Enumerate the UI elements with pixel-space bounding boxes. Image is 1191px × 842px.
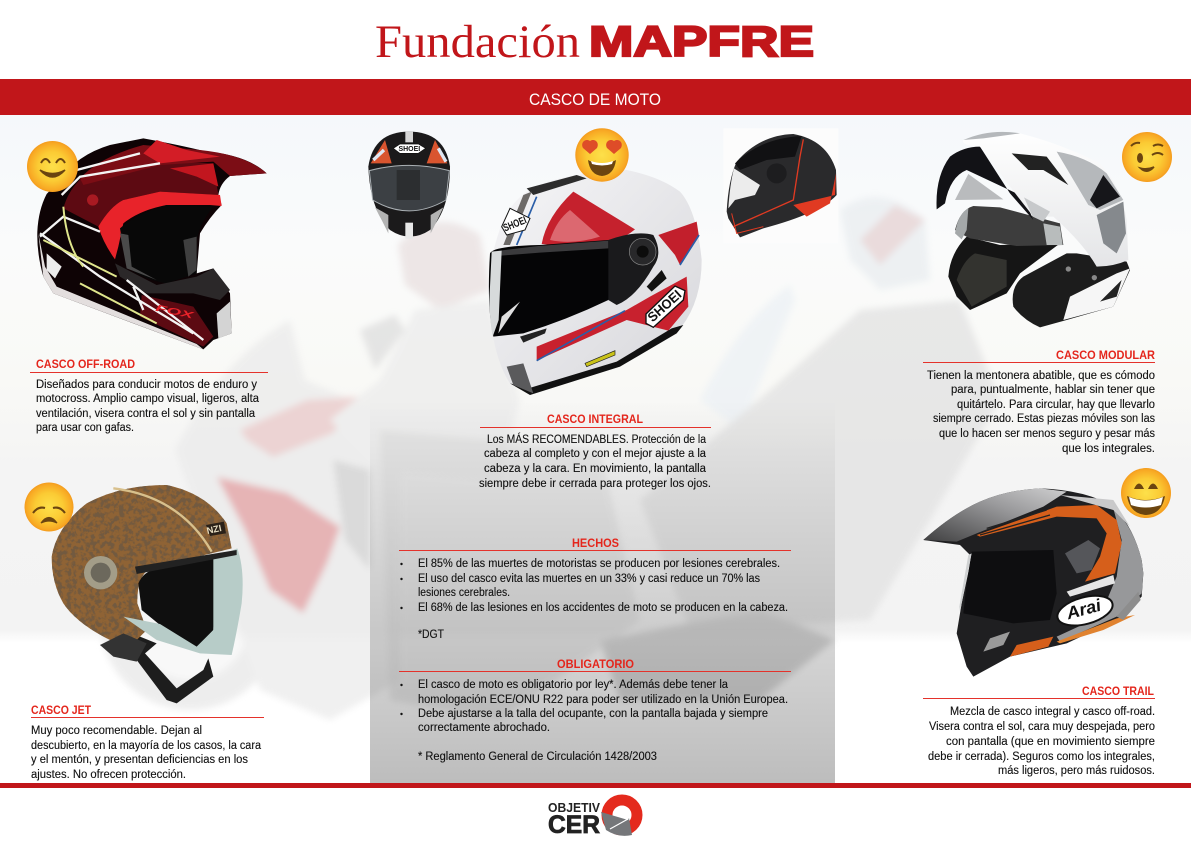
text block: casco modular: quitártelo. Para circular, hay que llevarlo (957, 399, 1155, 411)
helmet: off-road (37, 138, 267, 349)
text block: obligatorio (399, 659, 791, 763)
emoji: wink (1122, 132, 1172, 182)
title bar: CASCO DE MOTO (529, 90, 661, 109)
text block: casco jet: CASCO JET (31, 705, 91, 717)
text block: casco integral: Los MÁS RECOMENDABLES. Protección de la (487, 433, 707, 446)
logo: Fundación MAPFRE (375, 16, 814, 68)
emoji: smiling (27, 141, 78, 192)
emoji: big grin (1121, 468, 1171, 518)
text block: casco modular (923, 350, 1156, 455)
text block: hechos: lesiones cerebrales. (418, 587, 510, 599)
text block: casco off-road (30, 359, 268, 434)
logo: Fundación MAPFRE: Fundación (375, 16, 580, 68)
text block: casco jet: y el mentón, y presentan deficiencias en los (31, 754, 248, 766)
text block: casco modular: que los integrales. (1062, 443, 1155, 455)
helmet: off-road: FOX (155, 303, 196, 321)
helmet: trail (923, 488, 1143, 677)
text block: casco trail: con pantalla (que en movimiento siempre (946, 736, 1155, 748)
text block: obligatorio: * Reglamento General de Circulación 1428/2003 (418, 751, 657, 763)
helmet: Shoei integral: SHOEI (502, 214, 528, 234)
text block: casco modular: CASCO MODULAR (1056, 350, 1156, 362)
bottom red strip (0, 783, 1191, 788)
text block: hechos: El 85% de las muertes de motoristas se producen por lesiones cerebrales. (418, 558, 780, 570)
background photo: motorcycles (0, 115, 1191, 783)
text block: hechos (399, 538, 791, 641)
text block: casco integral: cabeza al completo y con el mejor ajuste a la (484, 448, 707, 460)
text block: casco modular: Tienen la mentonera abatible, que es cómodo (927, 370, 1155, 382)
text block: hechos: El uso del casco evita las muertes en un 33% y casi reduce un 70% las (418, 573, 760, 585)
helmet: small Shoei front view (368, 132, 450, 239)
text block: casco integral (479, 414, 711, 490)
logo: Objetivo Cero (548, 800, 637, 839)
helmet: trail: Arai (1063, 595, 1104, 623)
helmet: small Shoei front view: SHOEI (398, 146, 420, 153)
text block: casco trail: debe ir cerrada). Seguros como los integrales, (928, 751, 1155, 763)
helmet: modular (936, 132, 1130, 327)
text block: hechos: HECHOS (572, 538, 619, 550)
text block: casco trail: más ligeros, pero más ruidosos. (998, 765, 1155, 777)
emoji: heart eyes (575, 128, 629, 182)
helmet: jet (52, 485, 243, 703)
text block: hechos: *DGT (418, 629, 444, 641)
text block: casco trail: Mezcla de casco integral y casco off-road. (950, 706, 1155, 718)
text block: casco trail: CASCO TRAIL (1082, 686, 1154, 698)
helmet: Shoei integral: SHOEI (645, 287, 684, 325)
text block: obligatorio: OBLIGATORIO (557, 659, 634, 671)
text block: casco modular: que lo hacen ser menos seguro y pesar más (939, 428, 1155, 440)
text block: casco off-road: para usar con gafas. (36, 422, 134, 434)
title bar (0, 79, 1191, 115)
text block: obligatorio: homologación ECE/ONU R22 para poder ser utilizado en la Unión Europea. (418, 694, 788, 706)
text block: casco jet: Muy poco recomendable. Dejan al (31, 725, 202, 737)
text block: casco integral: siempre debe ir cerrada para proteger los ojos. (479, 478, 711, 490)
emoji: sad (24, 482, 74, 532)
text block: obligatorio: El casco de moto es obligatorio por ley*. Además debe tener la (418, 679, 729, 691)
logo: Objetivo Cero: CER (548, 811, 600, 839)
text block: obligatorio: Debe ajustarse a la talla del ocupante, con la pantalla bajada y siempre (418, 708, 768, 720)
text block: casco off-road: CASCO OFF-ROAD (36, 359, 135, 371)
text block: obligatorio: correctamente abrochado. (418, 722, 550, 734)
text block: casco off-road: Diseñados para conducir motos de enduro y (36, 379, 257, 391)
text block: casco off-road: ventilación, visera contra el sol y sin pantalla (36, 408, 256, 420)
text block: casco modular: siempre cerrado. Estas piezas móviles son las (933, 413, 1155, 425)
logo: Fundación MAPFRE: MAPFRE (589, 18, 814, 66)
helmet: jet: NZI (206, 523, 222, 536)
text block: casco jet: ajustes. No ofrecen protección. (31, 769, 186, 781)
text block: casco jet (31, 705, 264, 781)
text block: casco integral: CASCO INTEGRAL (547, 414, 643, 426)
text block: casco integral: cabeza y la cara. En movimiento, la pantalla (484, 463, 707, 475)
helmet: Shoei integral (488, 170, 702, 395)
helmet: small carbon and red (723, 128, 838, 243)
text block: casco trail (923, 686, 1155, 777)
text block: casco modular: para, puntualmente, hablar sin tener que (951, 384, 1155, 396)
grey text panel background (370, 400, 835, 783)
text block: hechos: El 68% de las lesiones en los accidentes de moto se producen en la cabeza. (418, 602, 788, 614)
text block: casco trail: Visera contra el sol, cara muy despejada, pero (929, 721, 1155, 733)
text block: casco off-road: motocross. Amplio campo visual, ligeros, alta (36, 393, 260, 405)
text block: casco jet: descubierto, en la mayoría de los casos, la cara (31, 740, 262, 752)
logo: Objetivo Cero: OBJETIV (548, 800, 600, 815)
